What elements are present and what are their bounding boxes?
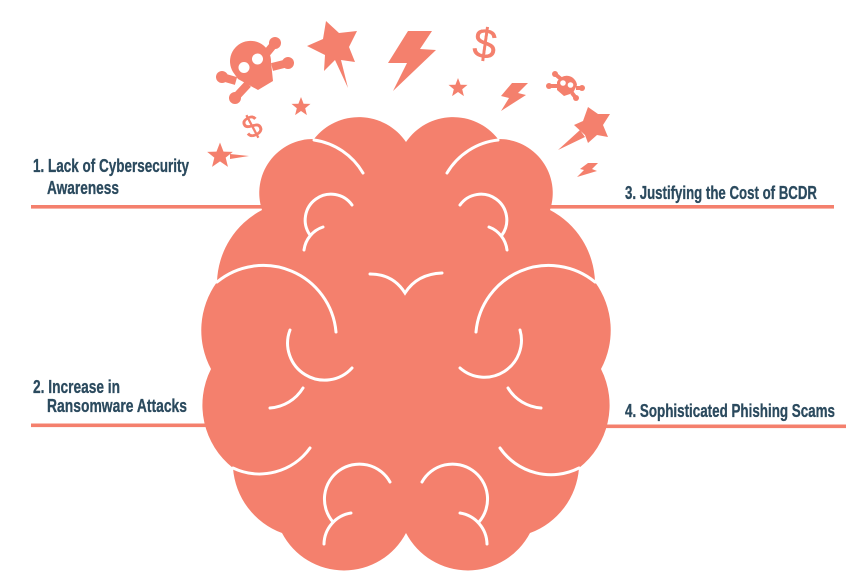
icon: large dollar sign: $ [470,19,500,68]
attack icons [207,19,610,177]
label 3 rule [548,205,834,209]
label 4 rule [600,424,846,428]
icon: small star [448,78,468,96]
icon: large skull and crossbones [216,37,294,104]
label 1 rule [31,205,266,209]
label 2 [33,377,187,416]
icon: small skull and crossbones [546,71,585,101]
label 2 second line: Ransomware Attacks [47,396,187,416]
icon: star with tail, right [558,107,610,150]
brain folds, left [217,140,390,544]
icon: large lightning bolt [388,31,436,91]
brain folds, right [422,140,595,544]
label 2 rule [31,424,209,427]
icon: dollar sign, left: $ [236,107,268,146]
icon: small star [292,97,310,115]
icon: large star with tail [307,21,357,88]
brain silhouette [201,117,611,571]
icon: small lightning bolt [577,163,598,177]
label 2 first line: 2. Increase in [33,377,120,397]
centre fold [370,273,442,293]
brain [201,117,611,571]
label 1 [33,156,189,198]
label 1 second line: Awareness [47,178,119,198]
icon: medium lightning bolt [501,83,528,111]
icon: star with tail, left [207,142,249,167]
label 1 first line: 1. Lack of Cybersecurity [33,156,189,176]
